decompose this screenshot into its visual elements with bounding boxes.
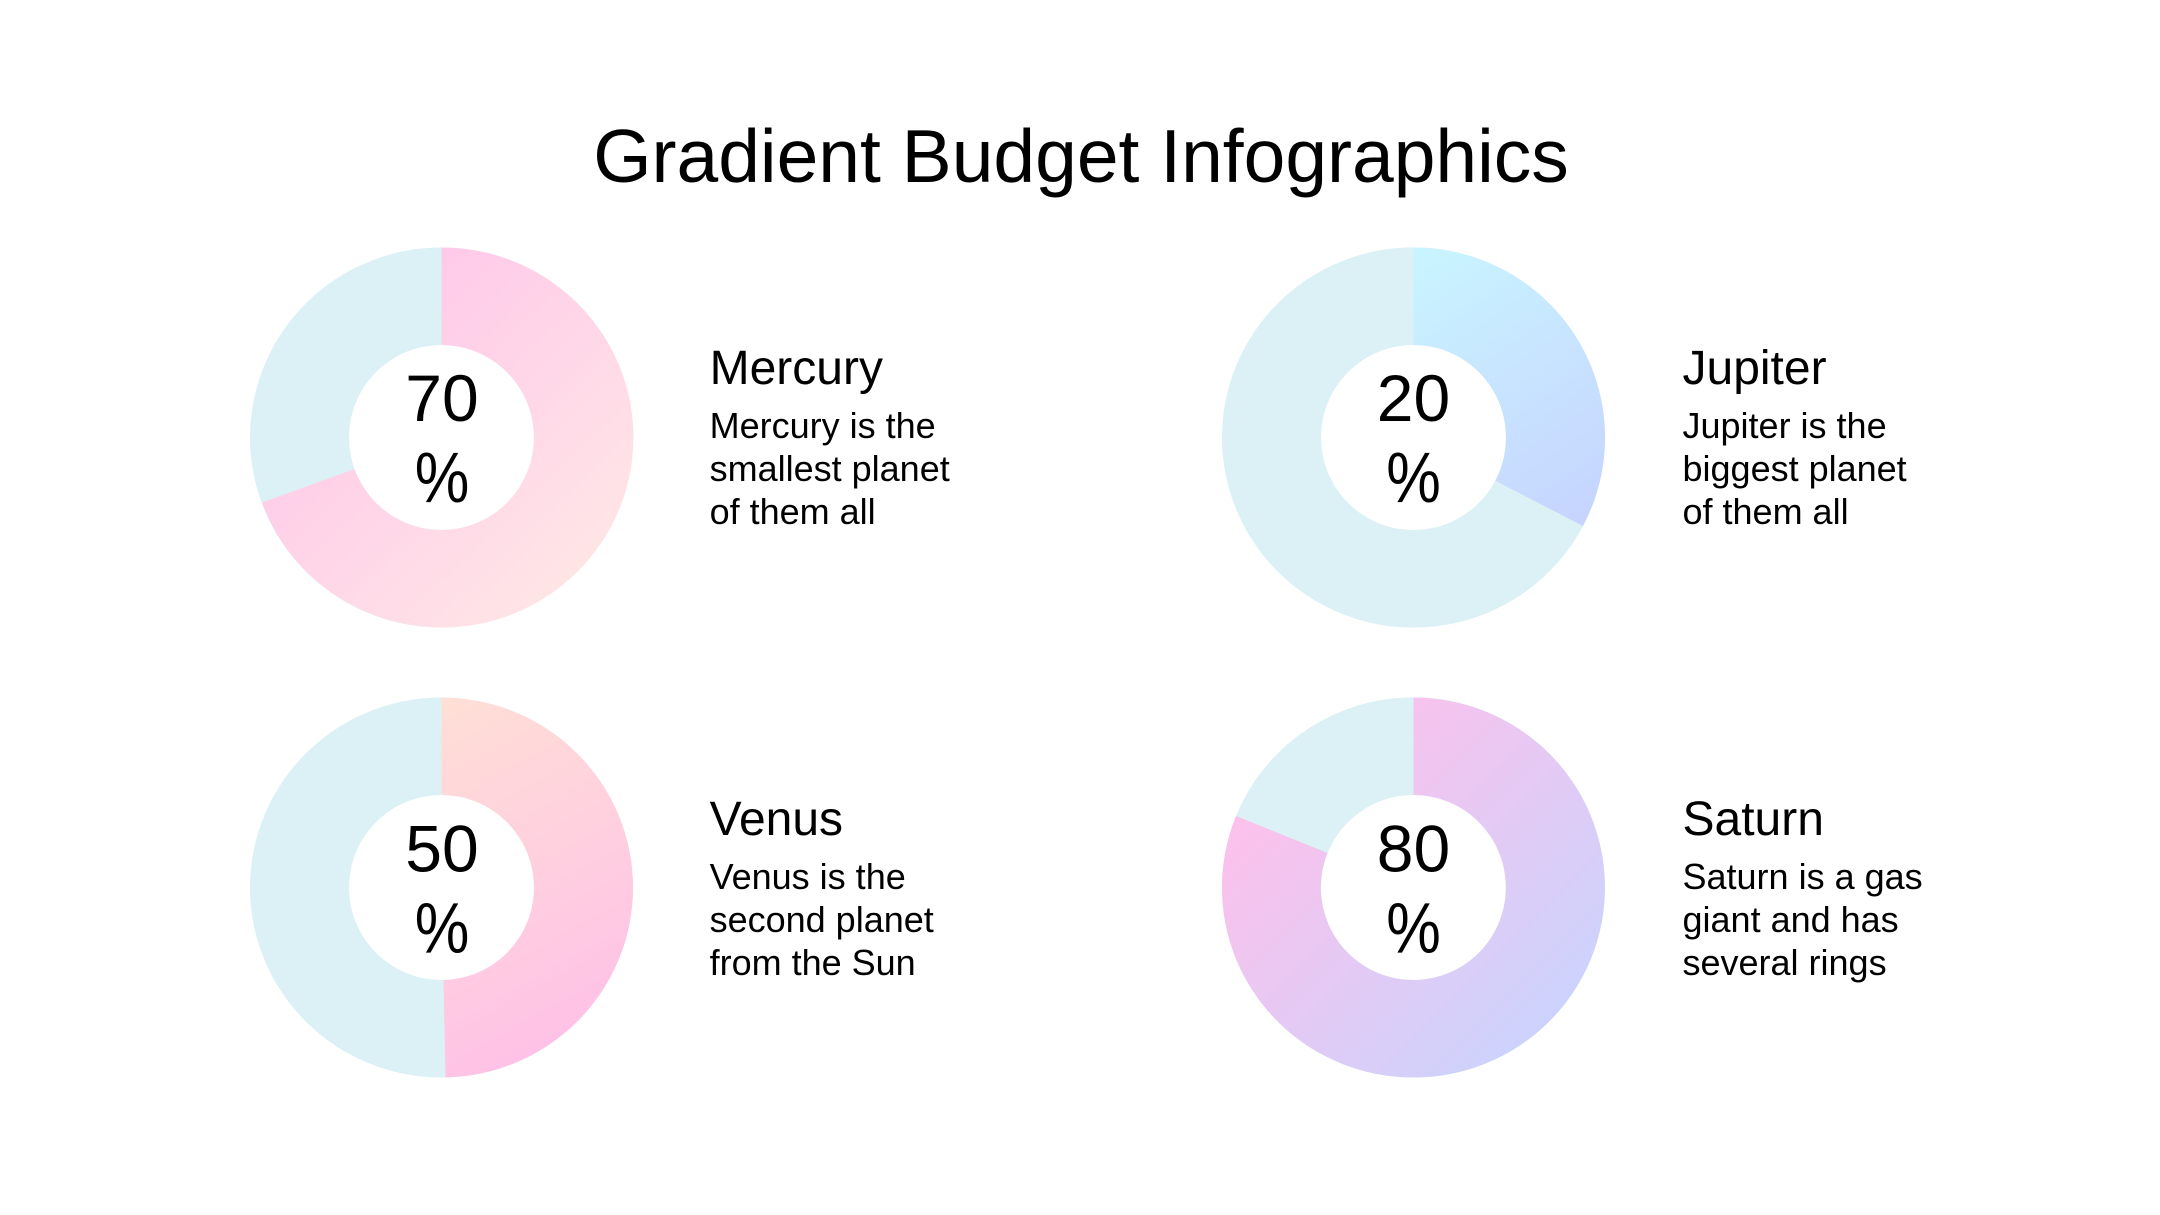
value: 70%: 70 xyxy=(405,361,479,435)
description: Saturn: giant and has xyxy=(1682,899,1899,940)
panel: Venus xyxy=(250,698,934,1078)
value: 50% xyxy=(405,812,479,969)
title: Gradient Budget Infographics xyxy=(593,114,1569,198)
value: 50%: 50 xyxy=(405,812,479,886)
heading: Saturn: Saturn xyxy=(1682,793,1824,846)
description: Jupiter: of them all xyxy=(1682,491,1849,532)
value: 20% xyxy=(1377,361,1450,518)
description: Saturn: several rings xyxy=(1682,942,1887,983)
description: Jupiter: Jupiter is the xyxy=(1682,405,1887,446)
panel: Saturn xyxy=(1222,697,1923,1078)
value: 20%: 20 xyxy=(1377,361,1450,435)
description: Mercury: smallest planet xyxy=(710,448,950,489)
heading: Venus: Venus xyxy=(710,793,843,846)
panel: Jupiter xyxy=(1222,247,1907,628)
description: Mercury: of them all xyxy=(710,491,876,532)
description: Saturn: Saturn is a gas xyxy=(1682,856,1923,897)
value: 70%: % xyxy=(415,439,469,518)
value: 80%: 80 xyxy=(1377,812,1450,886)
donut chart: Venus 50% xyxy=(250,698,633,1078)
donut chart: Saturn 80% xyxy=(1222,697,1605,1078)
description: Jupiter: biggest planet xyxy=(1682,448,1907,489)
value: 50%: % xyxy=(415,889,469,969)
value: 80% xyxy=(1377,812,1450,969)
description: Venus: Venus is the xyxy=(710,856,906,897)
value: 70% xyxy=(405,361,479,518)
panel: Mercury xyxy=(250,247,950,627)
donut chart: Jupiter 20% xyxy=(1222,247,1605,628)
donut chart: Mercury 70% xyxy=(250,247,633,627)
heading: Mercury: Mercury xyxy=(710,342,883,395)
description: Venus: from the Sun xyxy=(710,942,916,983)
value: 80%: % xyxy=(1386,889,1441,969)
value: 20%: % xyxy=(1386,439,1441,518)
description: Mercury: Mercury is the xyxy=(710,405,936,446)
heading: Jupiter: Jupiter xyxy=(1682,342,1827,395)
description: Venus: second planet xyxy=(710,899,934,940)
